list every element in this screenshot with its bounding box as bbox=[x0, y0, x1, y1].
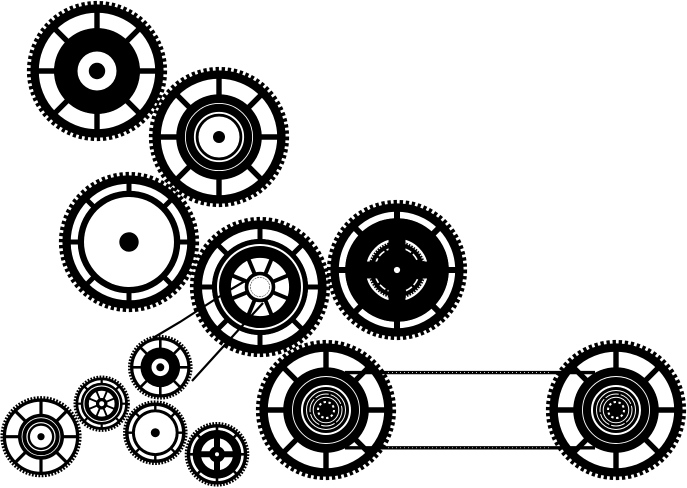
gear 2: ringed hub bbox=[151, 69, 287, 205]
gear 1: top-left, solid hub bbox=[29, 3, 165, 139]
gear 5: solid disc with arc slots bbox=[329, 202, 465, 338]
drive belt between spoked gear and small gear bbox=[153, 281, 263, 381]
gear 4: spoked wheel bbox=[192, 219, 328, 355]
gear 10: bottom-left ringed hub bbox=[2, 398, 80, 476]
chain belt between pulleys bbox=[345, 373, 595, 448]
gear 6: lower-left pulley bbox=[258, 342, 394, 478]
gear 11: small white disc bbox=[124, 402, 186, 464]
gear 7: lower-right pulley bbox=[548, 342, 684, 478]
gear 9: small spoked wheel bbox=[75, 377, 129, 431]
gear 8: small solid hub bbox=[129, 336, 191, 398]
gear 3: large white disc bbox=[61, 174, 197, 310]
gear 12: small solid disc with four windows bbox=[186, 423, 248, 485]
